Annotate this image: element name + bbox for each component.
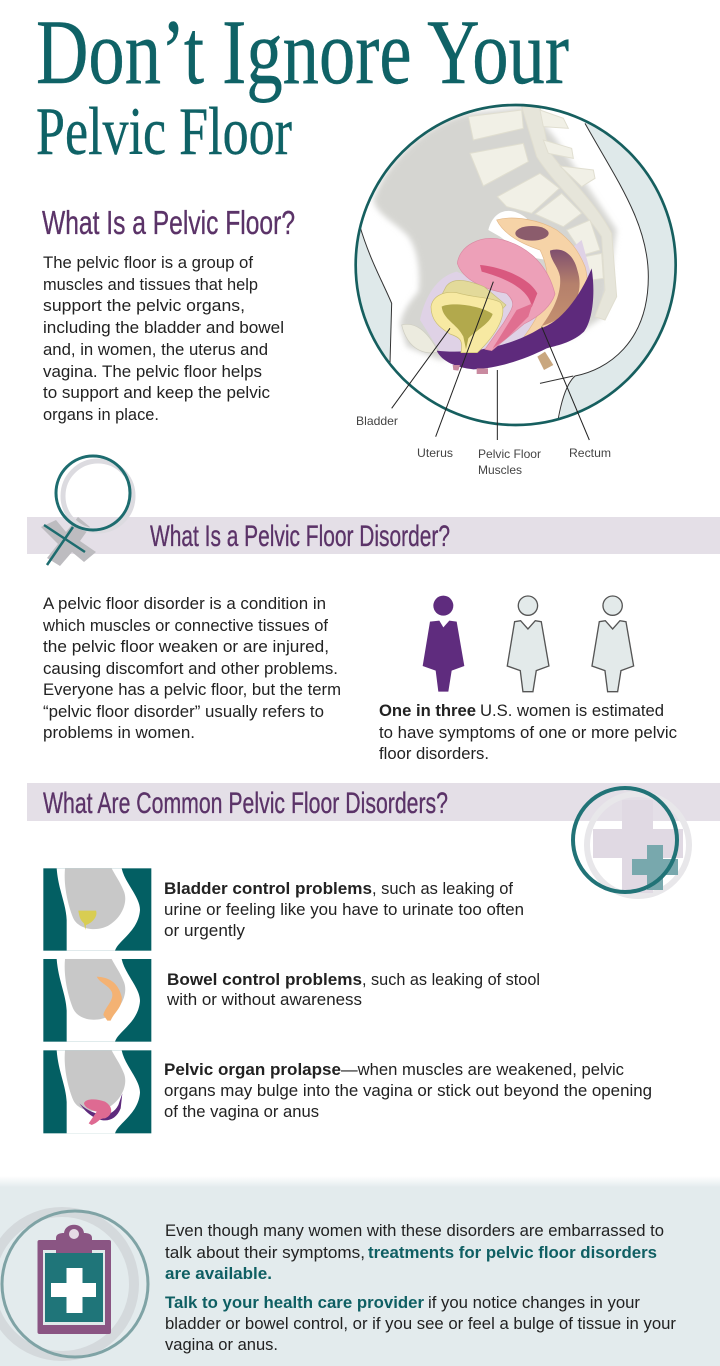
icon: clipboard <box>0 1211 148 1357</box>
text block: talk to provider <box>165 1293 676 1354</box>
diagram labels: Uterus <box>417 446 453 460</box>
heading band: common disorders <box>27 783 720 821</box>
text block: talk to provider: vagina or anus. <box>165 1335 278 1354</box>
diagram labels: Pelvic Floor <box>478 447 541 461</box>
text block: one in three: U.S. women is estimated <box>480 701 664 720</box>
text block: one in three: to have symptoms of one or more pelvic <box>379 723 677 742</box>
abdominal cavity <box>373 107 617 360</box>
text block: bladder control problems: urine or feeling like you have to urinate too often <box>164 900 524 919</box>
text block: pelvic floor definition <box>43 253 284 424</box>
text block: pelvic floor definition: vagina. The pelvic floor helps <box>43 362 262 381</box>
text block: disorder definition: Everyone has a pelvic floor, but the term <box>43 680 341 699</box>
pelvic floor muscles <box>437 268 593 369</box>
icon: female symbol <box>41 456 133 566</box>
text block: pelvic organ prolapse: Pelvic organ prolapse <box>164 1060 341 1079</box>
text block: disorder definition: “pelvic floor disorder” usually refers to <box>43 702 324 721</box>
text block: pelvic organ prolapse: of the vagina or anus <box>164 1102 319 1121</box>
rectum <box>497 218 587 340</box>
diagram labels: Bladder <box>356 414 398 428</box>
lilac tissue <box>420 240 592 353</box>
text block: bowel control problems: , such as leaking of stool <box>362 970 540 989</box>
openings below muscle <box>537 352 553 370</box>
text block: talk to provider: bladder or bowel control, or if you see or feel a bulge of tissue in your <box>165 1314 676 1333</box>
diagram labels <box>356 414 611 477</box>
text block: treatments available <box>165 1221 664 1283</box>
text block: bowel control problems <box>166 970 540 1009</box>
title: Pelvic Floor <box>36 93 292 169</box>
woman outline 1 <box>507 596 549 692</box>
heading: common disorders: What Are Common Pelvic Floor Disorders? <box>43 787 448 820</box>
text block: treatments available: are available. <box>165 1264 272 1283</box>
text block: one in three: floor disorders. <box>379 744 489 763</box>
uterus <box>457 238 555 351</box>
icon: pelvic organ prolapse <box>43 1050 151 1133</box>
woman filled <box>423 596 464 692</box>
heading: what is a pelvic floor: What Is a Pelvic Floor? <box>42 204 295 241</box>
text block: pelvic floor definition: to support and keep the pelvic <box>43 383 270 402</box>
icon: bladder control <box>43 868 151 951</box>
text block: talk to provider: if you notice changes in your <box>428 1293 640 1312</box>
leader lines <box>392 282 589 440</box>
diagram labels: Rectum <box>569 446 611 460</box>
heading band: pelvic floor disorder <box>27 517 720 554</box>
text block: talk to provider: Talk to your health care provider <box>165 1293 424 1312</box>
text block: pelvic floor definition: organs in place. <box>43 405 159 424</box>
body silhouette <box>361 106 648 424</box>
woman outline 2 <box>592 596 634 692</box>
spine <box>468 107 617 320</box>
text block: pelvic organ prolapse: organs may bulge into the vagina or stick out beyond the opening <box>164 1081 652 1100</box>
text block: one in three: One in three <box>379 701 476 720</box>
text block: disorder definition: which muscles or connective tissues of <box>42 616 328 635</box>
text block: bladder control problems <box>164 879 524 940</box>
text block: bladder control problems: or urgently <box>164 921 245 940</box>
text block: pelvic floor definition: The pelvic floor is a group of <box>43 253 253 272</box>
text block: disorder definition: A pelvic floor disorder is a condition in <box>43 594 326 613</box>
diagram labels: Muscles <box>478 463 522 477</box>
icon: medical cross <box>573 788 689 896</box>
white tissue behind organs <box>488 211 547 260</box>
text block: bladder control problems: Bladder control problems <box>164 879 372 898</box>
text block: pelvic organ prolapse <box>164 1060 652 1121</box>
text block: disorder definition: causing discomfort and other problems. <box>43 659 338 678</box>
title: Don’t Ignore Your <box>36 1 569 103</box>
text block: treatments available: Even though many women with these disorders are embarrassed to <box>165 1221 664 1240</box>
icon: three women <box>423 596 634 692</box>
text block: pelvic floor definition: and, in women, the uterus and <box>43 340 268 359</box>
bladder <box>431 280 506 353</box>
heading: what is a pelvic floor disorder: What Is a Pelvic Floor Disorder? <box>150 520 450 553</box>
text block: treatments available: talk about their symptoms, <box>165 1243 365 1262</box>
text block: bowel control problems: with or without awareness <box>166 990 362 1009</box>
anatomy diagram <box>340 90 676 440</box>
text block: disorder definition: problems in women. <box>43 723 195 742</box>
pubic bone <box>402 324 438 353</box>
text block: pelvic floor definition: support the pelvic organs, <box>43 296 245 315</box>
text block: pelvic floor definition: including the bladder and bowel <box>43 318 284 337</box>
text block: treatments available: treatments for pelvic floor disorders <box>368 1243 657 1262</box>
diagram background circle <box>356 105 676 425</box>
circle outline <box>356 105 676 425</box>
icon: bowel control <box>43 959 151 1042</box>
text block: pelvic organ prolapse: —when muscles are weakened, pelvic <box>341 1060 624 1079</box>
text block: one in three <box>379 701 677 763</box>
title <box>36 1 569 169</box>
text block: bladder control problems: , such as leaking of <box>372 879 513 898</box>
text block: bowel control problems: Bowel control problems <box>167 970 362 989</box>
text block: pelvic floor definition: muscles and tissues that help <box>43 275 258 294</box>
text block: disorder definition <box>42 594 341 742</box>
text block: disorder definition: the pelvic floor weaken or are injured, <box>43 637 329 656</box>
panel: treatment <box>0 1176 720 1366</box>
